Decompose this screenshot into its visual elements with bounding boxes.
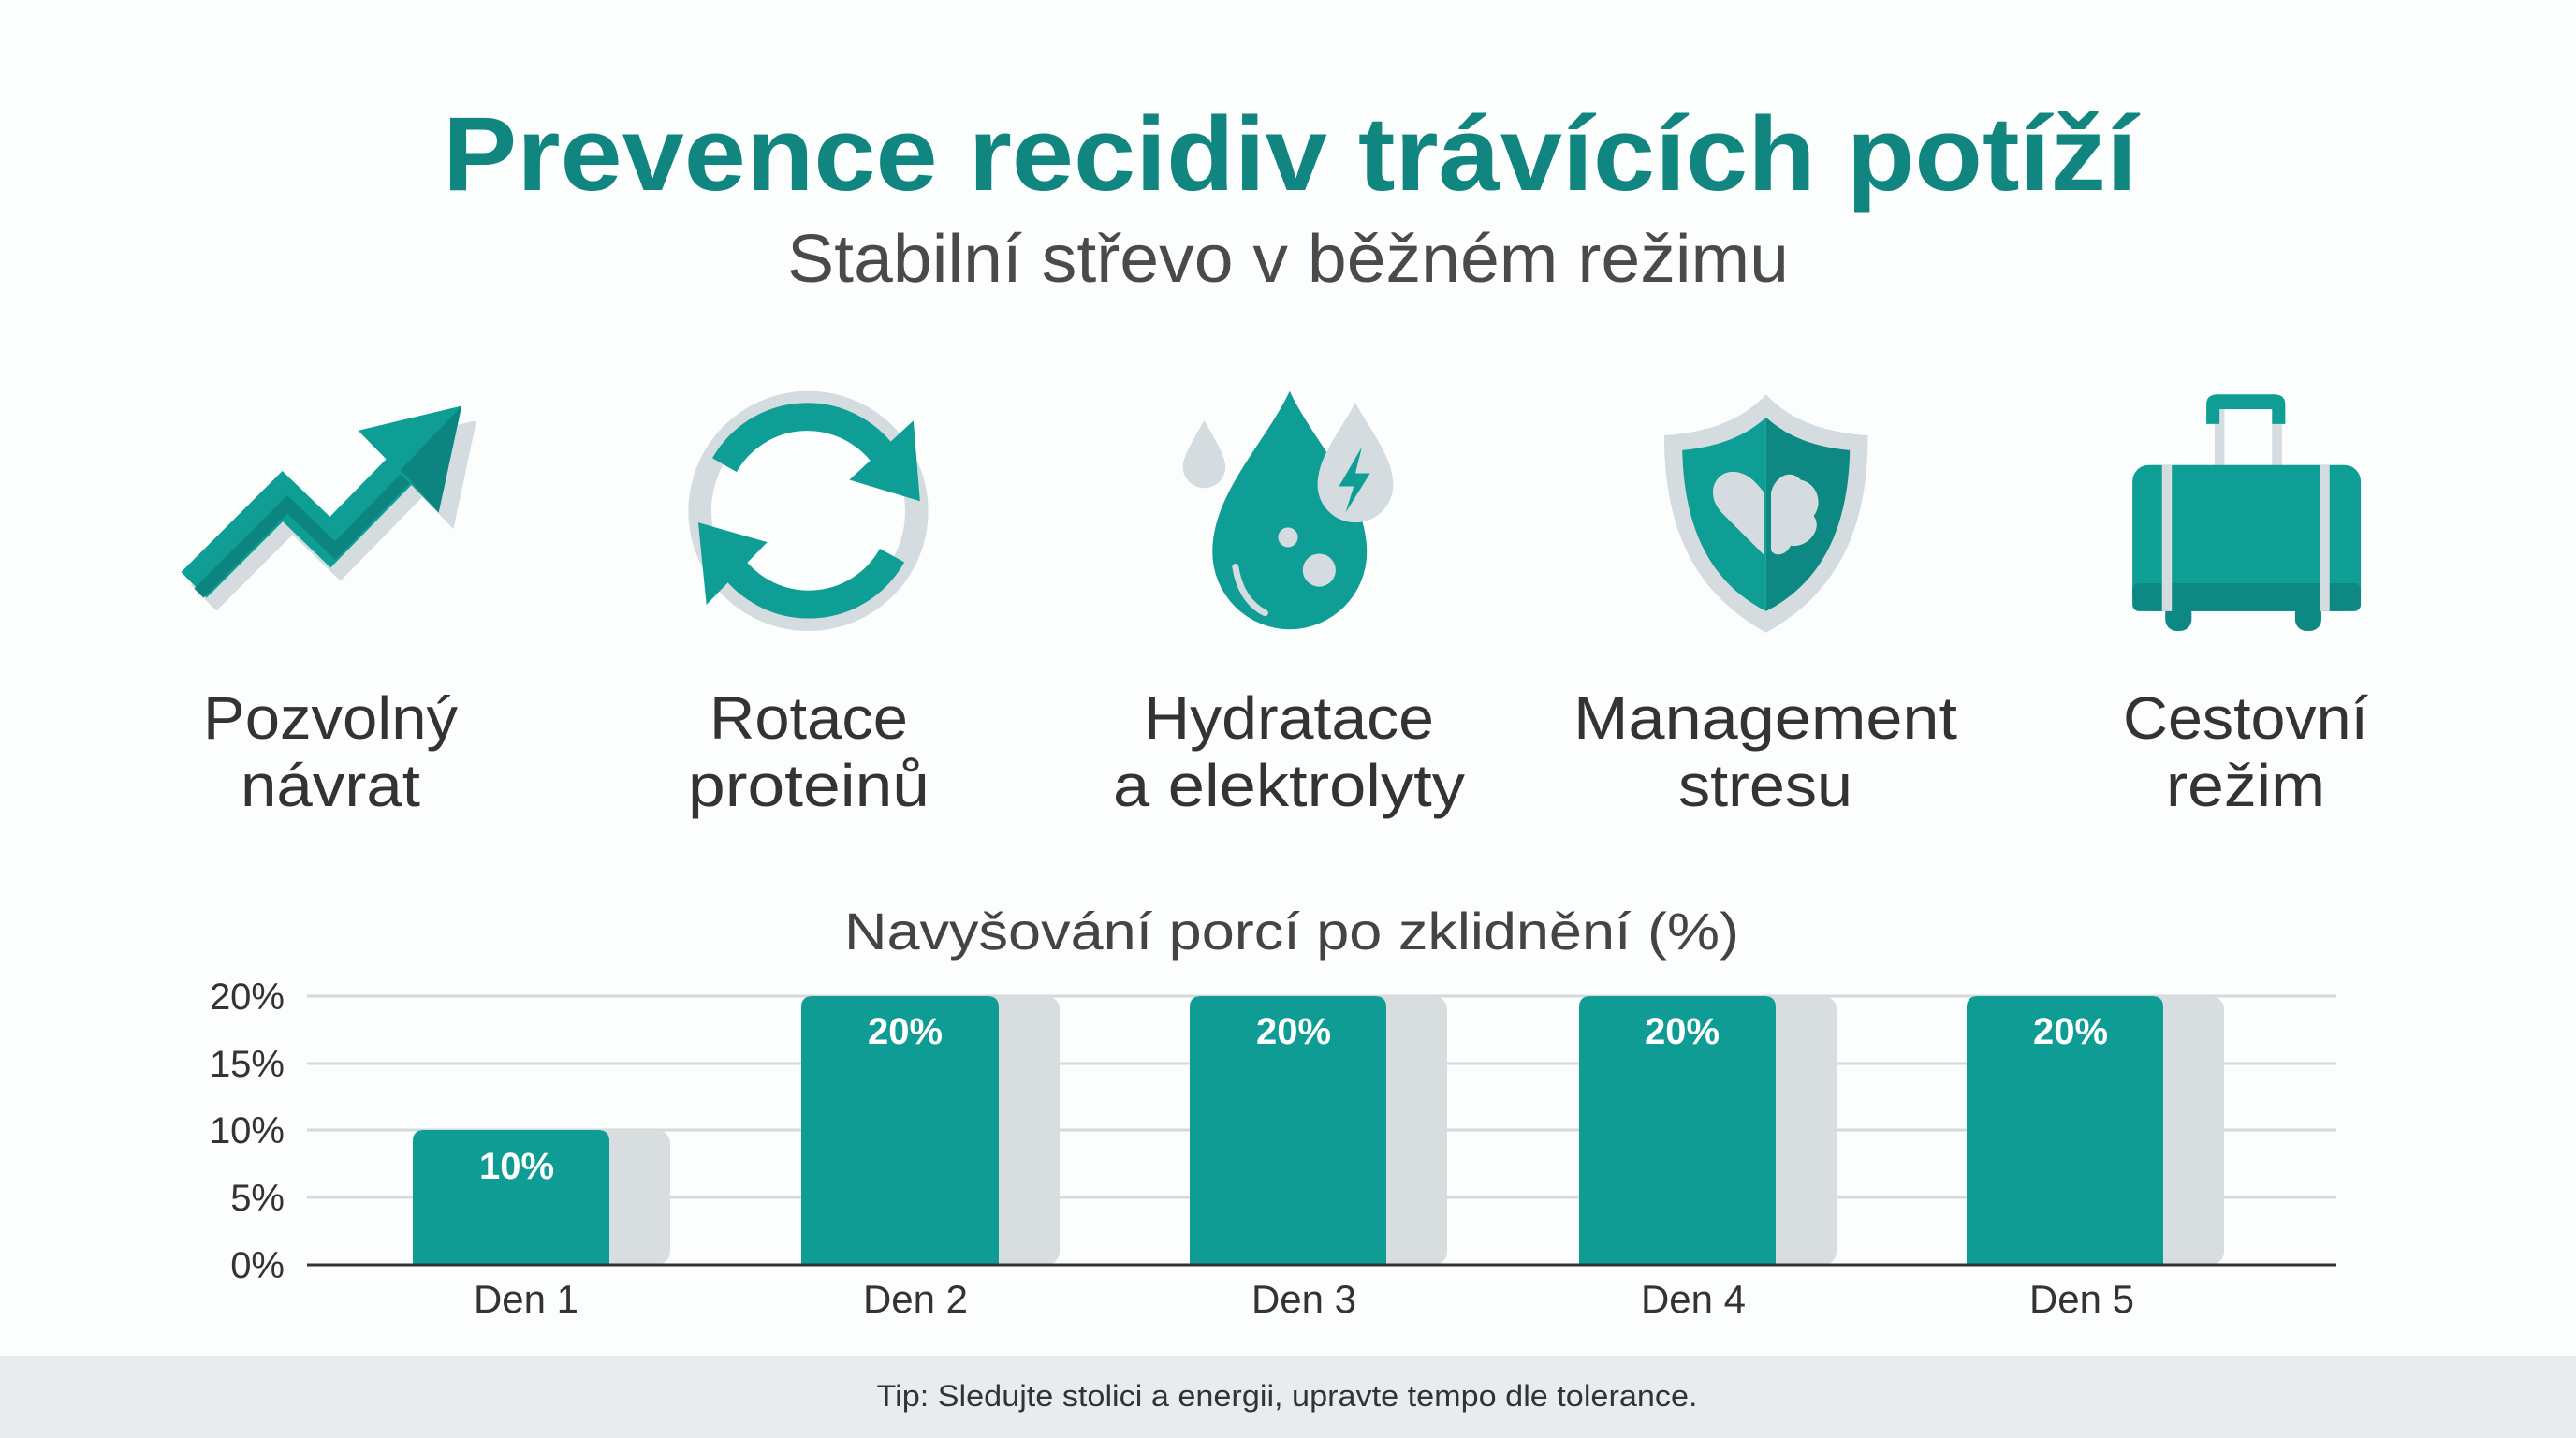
bar chart: Den 4 (1641, 1277, 1746, 1321)
label: Hydratace: Hydratace (1144, 684, 1434, 752)
bar chart: 20% (210, 976, 285, 1018)
label: Hydratace: a elektrolyty (1113, 752, 1465, 819)
bar chart: 20% (868, 1011, 943, 1052)
bar chart: Den 2 (863, 1277, 968, 1321)
bar chart: Den 1 (474, 1277, 578, 1321)
icon: rising arrow (194, 406, 476, 598)
bar chart: 10% (479, 1146, 554, 1187)
icon: shield heart brain (1664, 394, 1868, 633)
label: Pozvolný návrat: návrat (241, 752, 420, 819)
icon: suitcase (2132, 394, 2361, 631)
subtitle: Stabilní střevo v běžném režimu (787, 222, 1789, 297)
bar chart: Den 5 (2029, 1277, 2134, 1321)
bar chart (210, 976, 2336, 1321)
bar chart: 20% (1256, 1011, 1331, 1052)
bar chart: 10% (210, 1110, 285, 1152)
label: Management stresu: stresu (1678, 752, 1852, 819)
bar chart: 15% (210, 1044, 285, 1085)
footer tip: Tip: Sledujte stolici a energii, upravte tempo dle tolerance. (876, 1379, 1698, 1413)
icon: rotation arrows (698, 403, 920, 620)
label: Rotace proteinů: proteinů (688, 752, 929, 819)
chart title: Navyšování porcí po zklidnění (%) (844, 902, 1739, 961)
bar chart: Den 3 (1251, 1277, 1356, 1321)
label: Cestovní režim: Cestovní (2123, 684, 2368, 752)
labels (203, 684, 2368, 819)
bar chart: 20% (1645, 1011, 1720, 1052)
bar chart: 0% (230, 1245, 285, 1286)
title: Prevence recidiv trávících potíží (443, 95, 2141, 213)
bar chart: 5% (230, 1178, 285, 1219)
footer tip (0, 1356, 2576, 1438)
icon: water drops (1183, 391, 1393, 629)
label: Pozvolný návrat: Pozvolný (203, 684, 458, 752)
icons row (194, 391, 2361, 633)
label: Rotace proteinů: Rotace (710, 684, 908, 752)
label: Management stresu: Management (1573, 684, 1957, 752)
label: Cestovní režim: režim (2166, 752, 2325, 819)
bar chart: 20% (2033, 1011, 2108, 1052)
